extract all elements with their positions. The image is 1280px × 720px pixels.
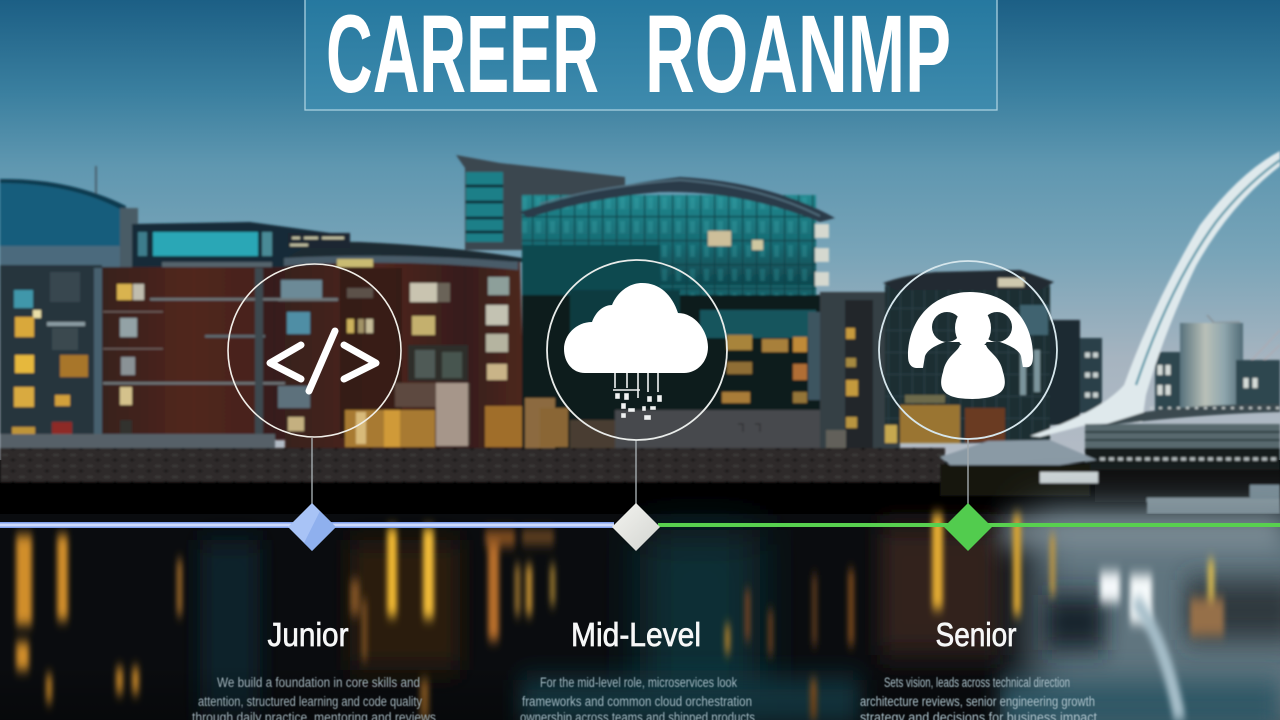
- building: glass tower: [520, 177, 835, 450]
- description: [520, 675, 755, 720]
- water: [0, 510, 1280, 720]
- description: attention, structured learning and code quality: [198, 694, 422, 709]
- diamond marker: [944, 503, 992, 551]
- title box: [305, 0, 997, 116]
- building: teal strip: [132, 222, 345, 270]
- diamond marker: [288, 503, 336, 551]
- heading: Junior: [268, 616, 348, 653]
- building: left block: [0, 166, 138, 441]
- bridge deck: [1085, 404, 1280, 480]
- bridge arch: [1030, 151, 1280, 437]
- connector stem: [967, 438, 969, 506]
- connector stem: [635, 440, 637, 506]
- milestone: Junior: [192, 264, 436, 720]
- quay wall: [0, 448, 1280, 520]
- building: mid block: [820, 292, 900, 450]
- circle with cloud icon: [547, 260, 727, 440]
- building: far right: [1155, 315, 1280, 414]
- building: brick left: [0, 267, 340, 448]
- heading: Mid-Level: [571, 616, 701, 653]
- milestone: Mid-Level: [520, 260, 755, 720]
- description: architecture reviews, senior engineering growth: [860, 694, 1095, 709]
- circle with team icon: [879, 261, 1057, 439]
- city skyline: [0, 151, 1280, 520]
- water reflections: [0, 514, 1224, 720]
- timeline track: [0, 522, 1280, 528]
- milestone: Senior: [860, 261, 1097, 720]
- building: brick center: [278, 233, 525, 448]
- description: Sets vision, leads across technical direction: [884, 675, 1070, 690]
- building: right block: [883, 270, 1102, 443]
- diamond marker: [612, 503, 660, 551]
- description: [192, 675, 436, 720]
- background: sky: [0, 0, 1280, 460]
- circle with code icon: [228, 264, 401, 437]
- pavilion roof: [940, 440, 1097, 465]
- description: [860, 675, 1097, 720]
- description: We build a foundation in core skills and: [217, 675, 420, 690]
- building: tall back: [456, 155, 625, 250]
- heading: Senior: [936, 616, 1017, 653]
- connector stem: [311, 438, 313, 506]
- description: frameworks and common cloud orchestration: [522, 694, 752, 709]
- description: For the mid-level role, microservices look: [540, 675, 737, 690]
